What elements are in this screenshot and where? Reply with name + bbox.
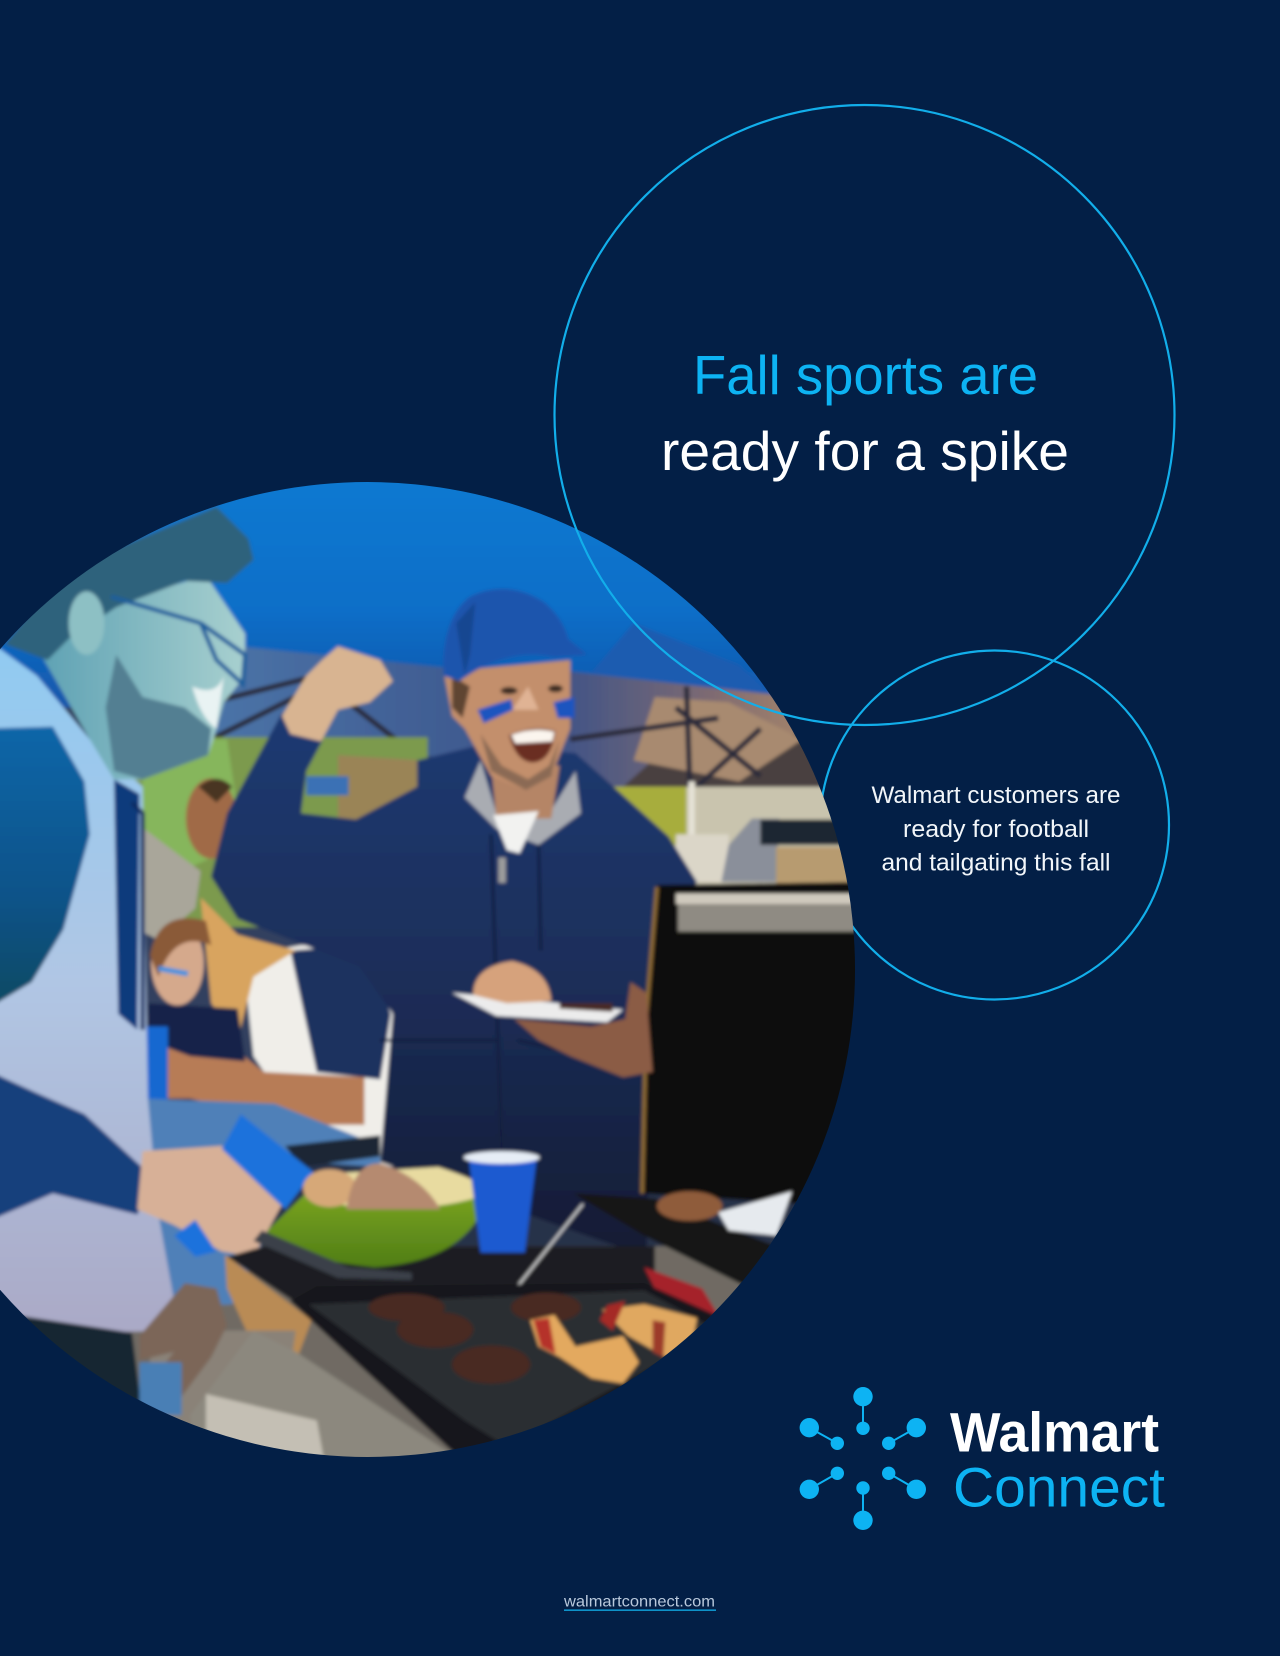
circle outline: headline ring — [554, 105, 1174, 725]
headline line one: Fall sports are — [693, 344, 1038, 406]
logo wordmark: Connect: Connect — [953, 1456, 1165, 1518]
man in foreground: navy sleeve — [0, 1074, 144, 1218]
callout text: ready for football — [903, 816, 1089, 843]
cheering man head — [444, 660, 575, 790]
boot and lower legs — [0, 1283, 227, 1415]
circle outline: small callout ring — [820, 650, 1169, 1000]
background man — [137, 778, 237, 940]
photo base tones — [63, 706, 796, 1451]
man in foreground: head — [5, 507, 253, 779]
child with face paint — [145, 918, 245, 1109]
burger patties — [369, 1293, 581, 1383]
callout text: and tailgating this fall — [882, 850, 1110, 876]
canopy underside and frame — [214, 644, 819, 788]
serving tongs — [253, 1230, 412, 1280]
serving table — [149, 1243, 656, 1424]
callout text: Walmart customers are — [872, 782, 1120, 809]
background greenery and truck — [132, 737, 861, 927]
blue cup on table — [464, 1151, 540, 1253]
cheering man neck and shirt — [465, 760, 581, 853]
cheering man jacket — [211, 713, 697, 1257]
blue baseball cap — [443, 589, 587, 681]
raised fist — [282, 646, 393, 741]
man in foreground: hand — [137, 1146, 285, 1257]
footer link: walmartconnect.com — [563, 1594, 715, 1610]
headline line two: ready for a spike — [661, 420, 1069, 482]
callout text — [872, 782, 1120, 876]
circular tailgating photo — [0, 465, 887, 1500]
logo icon: network spark — [800, 1387, 926, 1530]
plate with bun — [452, 961, 623, 1022]
headline — [661, 344, 1069, 482]
seated jeans — [137, 1098, 380, 1310]
hand holding plate — [514, 982, 653, 1077]
background woman in white shirt — [148, 898, 393, 1167]
logo wordmark: Walmart: Walmart — [950, 1400, 1159, 1464]
grill — [203, 1282, 714, 1457]
truck lid — [642, 882, 863, 1236]
vegetable skewers — [530, 1301, 697, 1383]
man in foreground: hoodie body — [0, 634, 180, 1333]
grill rack and sausage — [517, 1191, 792, 1315]
blue canopy — [0, 482, 771, 710]
blue cup in hand — [174, 1114, 314, 1257]
green salad bowl — [267, 1163, 491, 1267]
logo: Walmart Connect — [800, 1387, 1165, 1530]
